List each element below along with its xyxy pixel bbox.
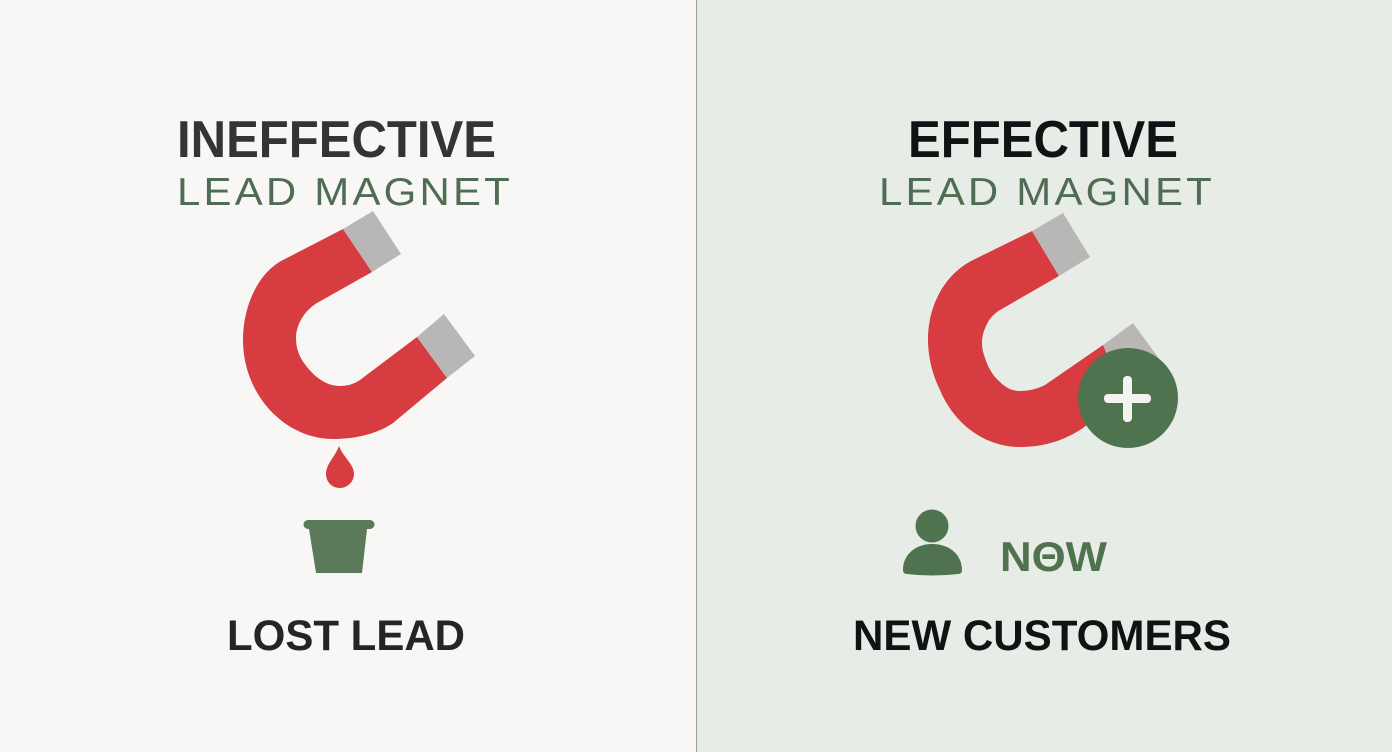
icon: magnet with plus badge — [928, 213, 1178, 448]
subheading: lead magnet: LEAD MAGNET — [879, 171, 1215, 214]
icon: falling drop — [326, 446, 354, 488]
heading: ineffective: INEFFECTIVE — [177, 111, 496, 169]
label: new customers: NEW CUSTOMERS — [853, 612, 1231, 660]
icon: person — [903, 510, 962, 576]
panel: ineffective — [0, 0, 696, 752]
heading: effective: EFFECTIVE — [908, 111, 1178, 169]
label: new: NΘW — [1000, 533, 1107, 580]
icon: plus badge — [1078, 348, 1178, 448]
label: lost lead: LOST LEAD — [227, 612, 465, 660]
panel: effective — [696, 0, 1392, 752]
icon: bucket — [304, 520, 374, 573]
subheading: lead magnet: LEAD MAGNET — [177, 171, 513, 214]
icon: magnet — [243, 211, 475, 439]
